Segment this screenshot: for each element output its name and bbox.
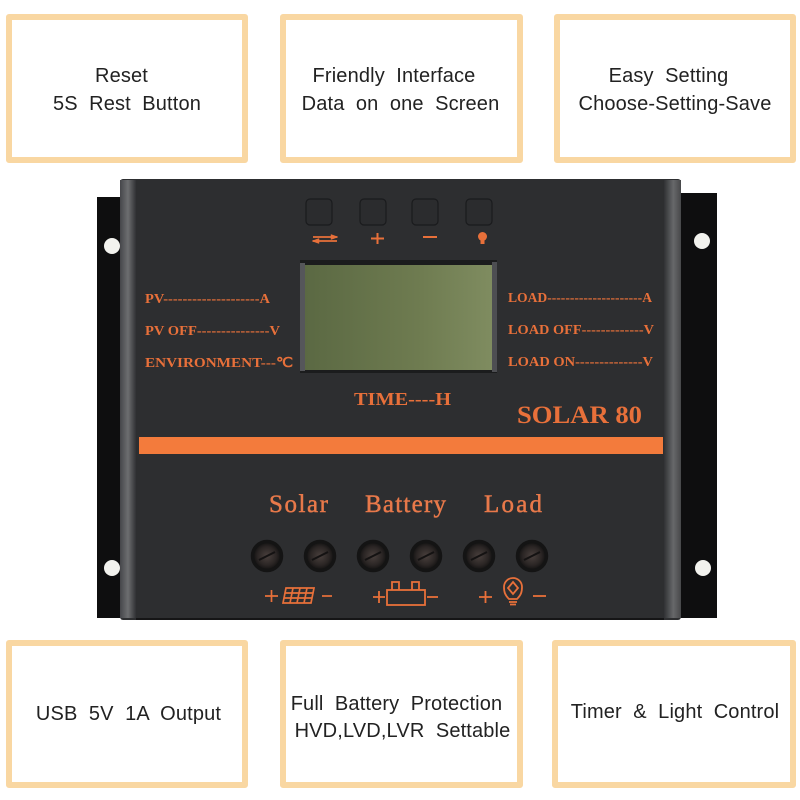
terminal labels [269, 491, 542, 518]
callout: friendly interface: Data on one Screen [302, 93, 499, 115]
right mounting bracket [678, 193, 717, 618]
left LCD labels: PV OFF---------------V [145, 324, 280, 339]
callout: reset button: Reset [95, 65, 148, 87]
callout: battery protection: HVD,LVD,LVR Settable [295, 720, 510, 742]
battery polarity icon [373, 582, 438, 605]
right LCD labels: LOAD ON--------------V [508, 355, 653, 370]
callout: timer and light control [552, 640, 796, 788]
button icons [312, 0, 487, 244]
callout: battery protection: Full Battery Protection [291, 693, 502, 715]
callout: battery protection [280, 640, 523, 788]
orange stripe [139, 437, 663, 454]
callout: USB output: USB 5V 1A Output [36, 703, 221, 725]
left LCD labels [145, 292, 293, 371]
right LCD labels [508, 291, 654, 370]
time label: TIME----H [354, 389, 451, 409]
right LCD labels: LOAD OFF-------------V [508, 323, 654, 338]
left LCD labels: ENVIRONMENT---℃ [145, 356, 293, 371]
terminal labels: Load [484, 491, 542, 518]
callout: reset button: 5S Rest Button [53, 93, 201, 115]
left LCD labels: PV--------------------A [145, 292, 271, 307]
callout: friendly interface: Friendly Interface [313, 65, 475, 87]
terminal labels: Solar [269, 491, 329, 518]
LCD screen [300, 260, 497, 373]
model name: SOLAR 80 [517, 402, 642, 429]
callout: easy setting: Easy Setting [609, 65, 728, 87]
callout: reset button [6, 14, 248, 163]
load bulb polarity icon [479, 578, 546, 604]
callout: easy setting [554, 14, 796, 163]
solar panel polarity icon [265, 588, 332, 603]
callout: easy setting: Choose-Setting-Save [579, 93, 771, 115]
controller body [120, 179, 681, 620]
right LCD labels: LOAD---------------------A [508, 291, 653, 306]
callout: USB output [6, 640, 248, 788]
callout: timer and light control: Timer & Light Control [571, 701, 779, 723]
terminal labels: Battery [365, 491, 446, 518]
terminal screws [252, 542, 546, 570]
left mounting bracket [97, 197, 123, 618]
callout: friendly interface [280, 14, 523, 163]
menu buttons [306, 199, 492, 225]
